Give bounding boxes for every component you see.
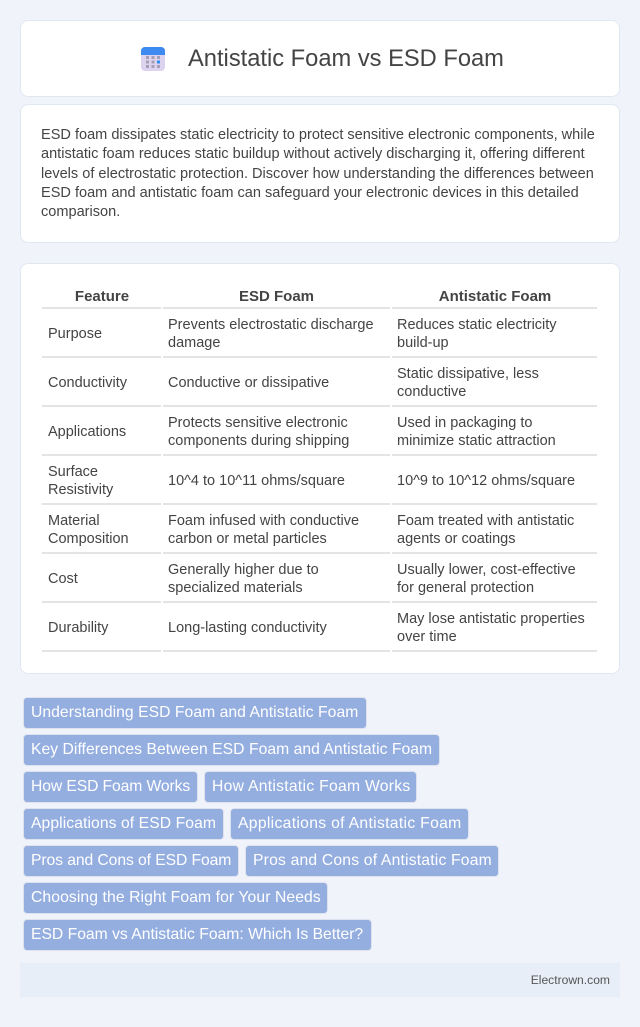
comparison table: components during shipping — [168, 433, 349, 449]
row: Applications: Applications — [48, 424, 126, 440]
row: Material Composition — [48, 513, 129, 547]
row: Conductivity: Conductivity — [48, 375, 127, 391]
intro panel — [20, 104, 620, 243]
comparison table: agents or coatings — [397, 531, 516, 547]
comparison table: Reduces static electricity — [397, 317, 557, 333]
comparison table: Foam infused with conductive — [168, 513, 359, 529]
comparison table: Foam treated with antistatic — [397, 513, 574, 529]
title: Antistatic Foam vs ESD Foam — [188, 46, 504, 72]
row: Material Composition: Material — [48, 513, 100, 529]
comparison table: Prevents electrostatic discharge — [168, 317, 374, 333]
intro text — [41, 127, 595, 220]
comparison table: Usually lower, cost-effective — [397, 562, 576, 578]
table header: Antistatic Foam: Antistatic Foam — [439, 288, 551, 305]
comparison table: conductive — [397, 384, 466, 400]
comparison table: minimize static attraction — [397, 433, 556, 449]
comparison table: damage — [168, 335, 220, 351]
tag — [245, 845, 499, 877]
comparison table: 10^9 to 10^12 ohms/square — [397, 473, 575, 489]
tag: Applications of Antistatic Foam — [238, 815, 462, 832]
comparison table: Generally higher due to — [168, 562, 319, 578]
table header: ESD Foam: ESD Foam — [239, 288, 314, 305]
row: Purpose: Purpose — [48, 326, 102, 342]
comparison table: May lose antistatic properties — [397, 611, 585, 627]
row: Material Composition: Composition — [48, 531, 129, 547]
comparison table: 10^4 to 10^11 ohms/square — [168, 473, 345, 489]
comparison table panel — [20, 263, 620, 674]
comparison table: specialized materials — [168, 580, 303, 596]
tag — [230, 808, 469, 840]
row: Surface Resistivity — [48, 464, 114, 498]
tag: Pros and Cons of ESD Foam — [31, 852, 231, 869]
intro text: ESD foam dissipates static electricity to protect sensitive electronic components, while — [41, 127, 595, 143]
tag — [23, 697, 367, 729]
intro text: antistatic foam reduces static buildup without actively discharging it, offering different — [41, 146, 585, 162]
comparison table: over time — [397, 629, 457, 645]
table header: Feature: Feature — [75, 288, 129, 305]
comparison table: Static dissipative, less — [397, 366, 539, 382]
tag — [23, 919, 372, 951]
comparison table: build-up — [397, 335, 449, 351]
footer credit: Electrown.com — [531, 973, 610, 987]
intro text: levels of electrostatic protection. Discover how understanding the differences between — [41, 166, 594, 182]
comparison table — [42, 288, 597, 652]
tag: How ESD Foam Works — [31, 778, 190, 795]
row: Surface Resistivity: Resistivity — [48, 482, 113, 498]
tag: Choosing the Right Foam for Your Needs — [31, 889, 321, 906]
tag: ESD Foam vs Antistatic Foam: Which Is Better? — [31, 926, 363, 943]
comparison table: Conductive or dissipative — [168, 375, 329, 391]
tag: Applications of ESD Foam — [31, 815, 216, 832]
tag — [23, 771, 198, 803]
intro text: comparison. — [41, 204, 120, 220]
intro text: ESD foam and antistatic foam can safeguard your electronic devices in this detailed — [41, 185, 579, 201]
icon: calendar — [141, 47, 165, 71]
tag — [23, 845, 239, 877]
comparison table: Protects sensitive electronic — [168, 415, 348, 431]
footer bar — [20, 963, 620, 997]
tag: Understanding ESD Foam and Antistatic Foam — [31, 704, 358, 721]
tag — [23, 882, 328, 914]
tag: Pros and Cons of Antistatic Foam — [253, 852, 492, 869]
topic tags — [23, 697, 499, 951]
comparison table: Long-lasting conductivity — [168, 620, 327, 636]
row: Surface Resistivity: Surface — [48, 464, 98, 480]
tag: How Antistatic Foam Works — [212, 778, 410, 795]
row: Cost: Cost — [48, 571, 78, 587]
tag — [204, 771, 417, 803]
comparison table: Used in packaging to — [397, 415, 532, 431]
header panel — [20, 20, 620, 97]
comparison table: for general protection — [397, 580, 534, 596]
tag — [23, 808, 224, 840]
tag: Key Differences Between ESD Foam and Antistatic Foam — [31, 741, 432, 758]
row: Durability: Durability — [48, 620, 108, 636]
comparison table: carbon or metal particles — [168, 531, 327, 547]
tag — [23, 734, 440, 766]
